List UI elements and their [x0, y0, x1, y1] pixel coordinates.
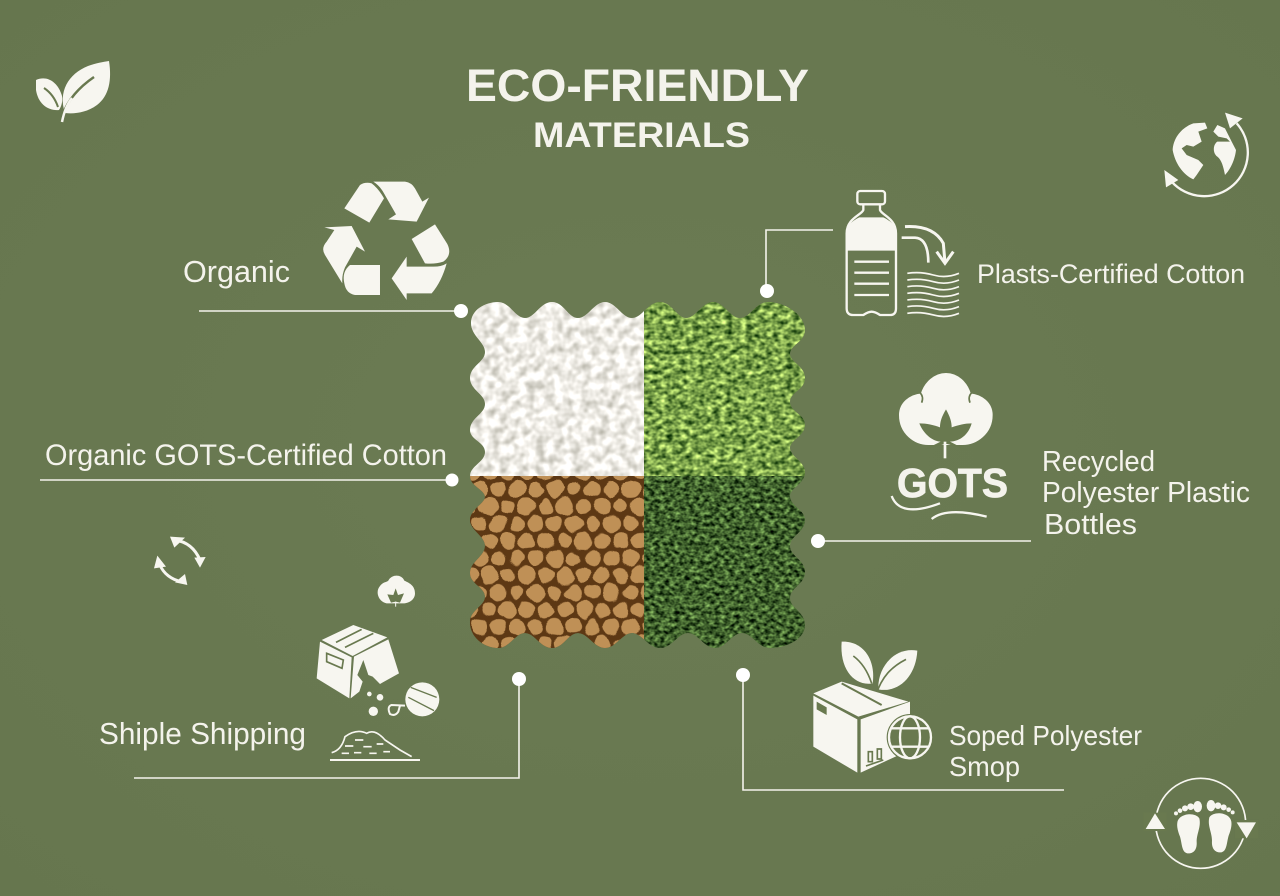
title [466, 60, 809, 155]
icon: GOTS cotton: GOTS [897, 460, 1008, 506]
swatch: light green [644, 298, 809, 476]
icon: globe with arrows top right [1164, 113, 1248, 196]
label: Soped Polyester Smop [949, 720, 1142, 782]
icon: small cotton boll [378, 576, 415, 607]
icon: footprints in cycle [1143, 778, 1258, 868]
connector: bottle [760, 230, 833, 298]
label: Recycled Polyester Plastic Bottles: Recycled [1042, 446, 1155, 478]
label: Shiple Shipping: Shiple Shipping [99, 716, 306, 751]
label: Soped Polyester Smop: Soped Polyester [949, 720, 1142, 751]
label: Recycled Polyester Plastic Bottles: Bottles [1044, 509, 1137, 541]
icon: plastic bottle to fibre [847, 191, 959, 316]
icon: small cycle arrows [154, 537, 206, 585]
central fabric swatch [470, 302, 805, 648]
label: Organic [183, 254, 468, 318]
label: Organic GOTS-Certified Cotton [40, 439, 458, 486]
label: Plasts-Certified Cotton: Plasts-Certified Cotton [977, 259, 1245, 289]
title: ECO-FRIENDLY [466, 60, 809, 111]
label: Recycled Polyester Plastic Bottles [1042, 446, 1250, 541]
label: Recycled Polyester Plastic Bottles: Polyester Plastic [1042, 477, 1250, 509]
icon: GOTS cotton [892, 374, 1008, 519]
title: MATERIALS [533, 116, 750, 155]
label: Soped Polyester Smop: Smop [949, 751, 1020, 782]
icon: recycle symbol [323, 182, 449, 300]
connector: polyester shop [736, 668, 1064, 790]
icon: leaves top left [36, 61, 110, 122]
label: Organic GOTS-Certified Cotton: Organic GOTS-Certified Cotton [45, 439, 447, 472]
icon: broken box and compost [317, 625, 439, 760]
connector: shipping [134, 672, 526, 778]
swatch: dark green [644, 476, 809, 652]
icon: parcel with leaves and globe [813, 642, 933, 773]
connector: recycled polyester [811, 534, 1031, 548]
swatch: white cotton [465, 298, 644, 476]
swatch: brown pellets [470, 476, 644, 648]
label: Organic: Organic [183, 254, 290, 289]
